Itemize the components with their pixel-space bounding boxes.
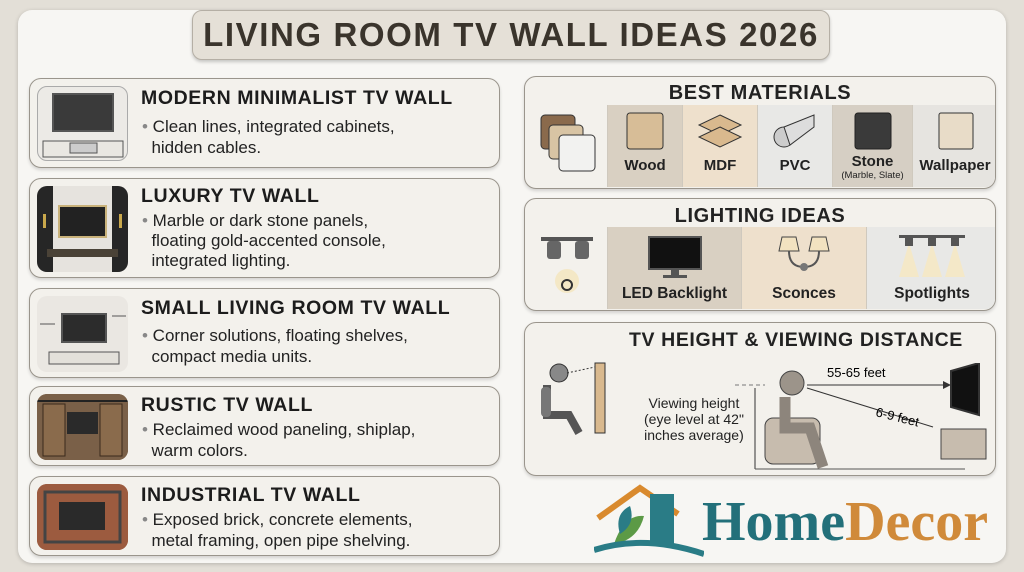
cell: LED backlight: LED Backlight xyxy=(622,285,727,302)
text: compact media units. xyxy=(151,347,312,366)
cell: MDF: MDF xyxy=(704,157,736,174)
heading: MODERN MINIMALIST TV WALL xyxy=(141,87,453,109)
icon: house logo xyxy=(594,484,704,557)
text: • Marble or dark stone panels, xyxy=(142,211,368,230)
wordmark: HomeDecor xyxy=(702,491,988,553)
cell: spotlights: Spotlights xyxy=(894,285,970,302)
text xyxy=(142,420,415,460)
text xyxy=(142,510,413,550)
text: • Corner solutions, floating shelves, xyxy=(142,326,408,345)
text xyxy=(142,211,386,270)
panel: rustic xyxy=(29,386,500,466)
heading: SMALL LIVING ROOM TV WALL xyxy=(141,297,450,319)
text: metal framing, open pipe shelving. xyxy=(151,531,410,550)
heading: TV HEIGHT & VIEWING DISTANCE xyxy=(629,329,963,351)
cell: PVC xyxy=(757,105,832,187)
diagram: viewing distance: 6-9 feet xyxy=(874,404,921,430)
panel: tv height & viewing distance xyxy=(524,322,996,476)
cell: PVC: PVC xyxy=(780,157,810,174)
cell: stone: (Marble, Slate) xyxy=(841,170,904,181)
icon: seated person with ruler xyxy=(541,362,606,435)
heading: RUSTIC TV WALL xyxy=(141,394,313,416)
text: • Exposed brick, concrete elements, xyxy=(142,510,413,529)
cell: wallpaper: Wallpaper xyxy=(919,157,991,174)
text: viewing height: (eye level at 42" xyxy=(644,411,744,427)
cell: wood xyxy=(607,105,682,187)
cell: LED backlight xyxy=(607,227,741,309)
heading: LIGHTING IDEAS xyxy=(675,205,845,227)
cell: sconces xyxy=(741,227,866,309)
icon: luxury tv xyxy=(37,186,128,272)
text: • Reclaimed wood paneling, shiplap, xyxy=(142,420,415,439)
cell: wood: Wood xyxy=(624,157,666,174)
text: viewing height: Viewing height xyxy=(649,395,739,411)
panel: luxury xyxy=(29,178,500,278)
icon: rustic barn doors xyxy=(37,394,128,460)
icon: small tv xyxy=(37,296,128,372)
cell: wallpaper xyxy=(912,105,997,187)
panel: small living room xyxy=(29,288,500,378)
cell: stone xyxy=(832,105,912,187)
text: viewing height: inches average) xyxy=(644,427,744,443)
panel: lighting ideas xyxy=(524,198,996,311)
panel: industrial xyxy=(29,476,500,556)
text: hidden cables. xyxy=(151,138,261,157)
icon: track lights xyxy=(541,237,593,293)
panel: best materials xyxy=(524,76,996,189)
logo: HomeDecor xyxy=(594,484,988,557)
diagram: viewing distance xyxy=(735,363,986,470)
text: floating gold-accented console, xyxy=(151,231,386,250)
text: warm colors. xyxy=(151,441,248,460)
cell: MDF xyxy=(682,105,757,187)
title: LIVING ROOM TV WALL IDEAS 2026 xyxy=(203,16,819,53)
panel: modern minimalist xyxy=(29,78,500,168)
heading: LUXURY TV WALL xyxy=(141,185,319,207)
cell: sconces: Sconces xyxy=(772,285,836,302)
icon: minimalist tv xyxy=(37,86,128,161)
cell: spotlights xyxy=(866,227,997,309)
text: • Clean lines, integrated cabinets, xyxy=(142,117,395,136)
text xyxy=(142,326,408,366)
cell: stone: Stone xyxy=(852,153,893,170)
heading: BEST MATERIALS xyxy=(669,82,851,104)
icon: industrial brick xyxy=(37,484,128,550)
text xyxy=(142,117,395,157)
text: viewing height xyxy=(644,395,744,443)
heading: INDUSTRIAL TV WALL xyxy=(141,484,361,506)
diagram: viewing distance: 55-65 feet xyxy=(827,365,886,380)
icon: material swatches xyxy=(540,114,596,172)
text: integrated lighting. xyxy=(151,251,290,270)
